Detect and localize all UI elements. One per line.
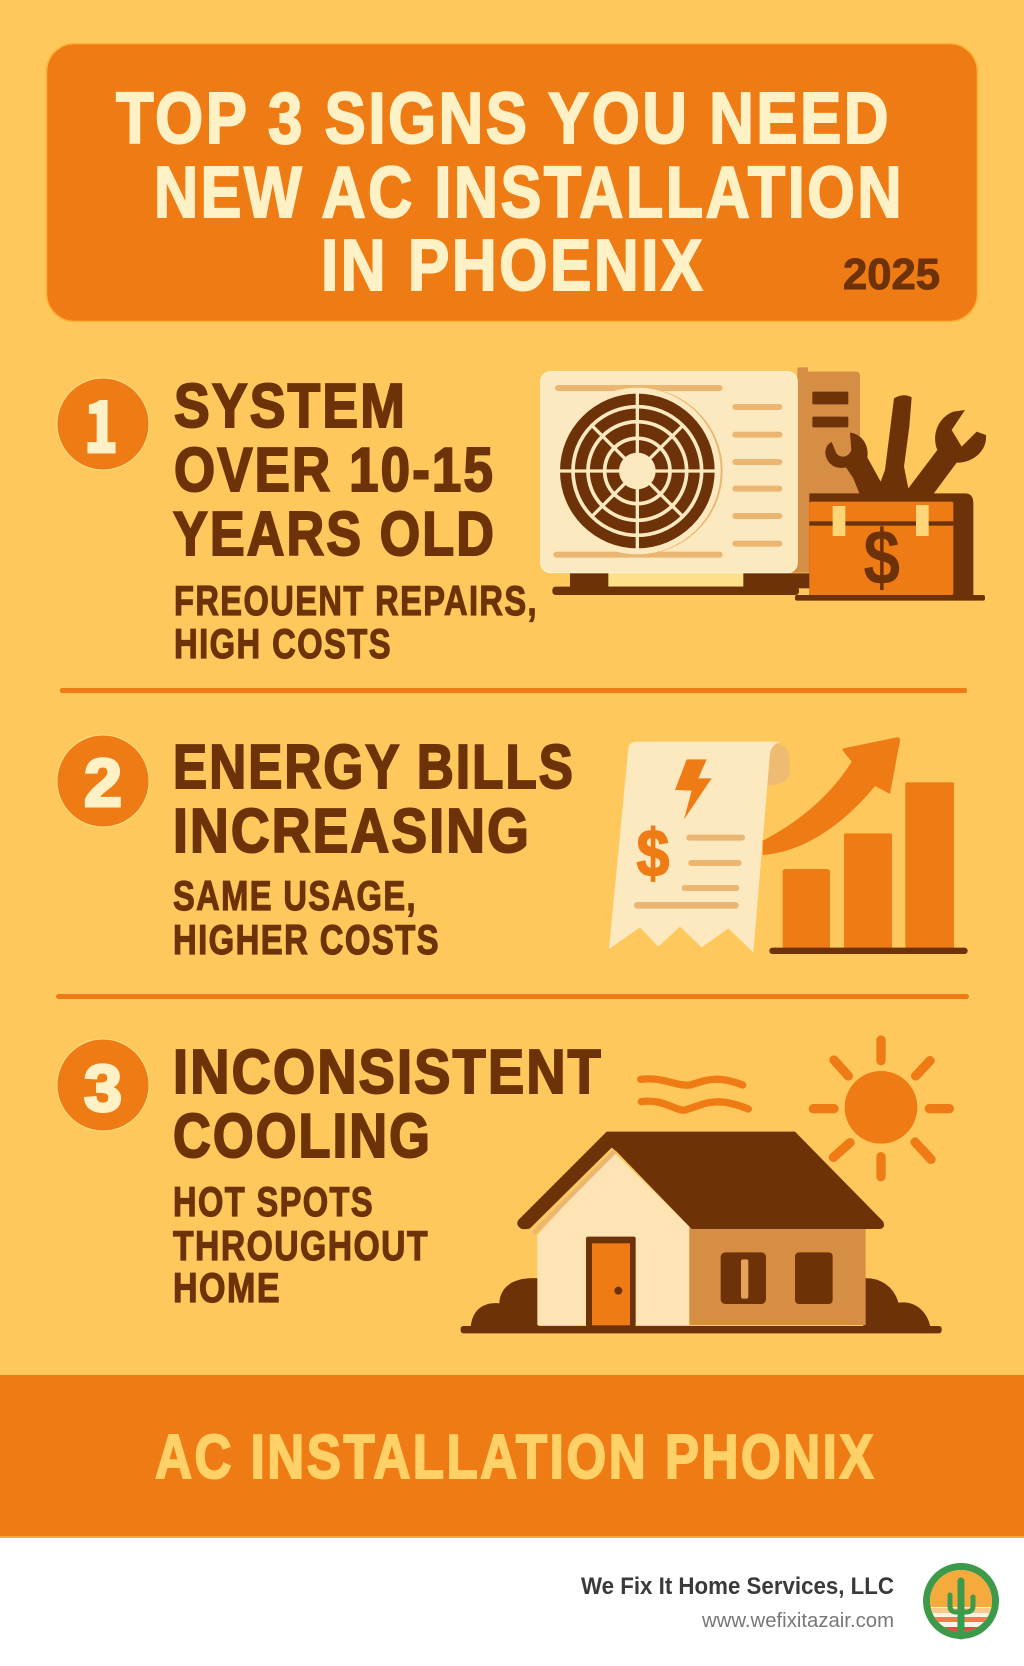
heading: inconsistent cooling xyxy=(173,1038,603,1171)
rising arrow xyxy=(763,737,900,855)
heading: energy bills increasing: INCREASING xyxy=(173,797,531,866)
number badge 2: 2 xyxy=(84,745,122,821)
icon: toolbox xyxy=(809,493,973,601)
subtext: same usage higher costs: SAME USAGE, xyxy=(173,872,417,919)
number badge 1 xyxy=(57,372,149,473)
footer band xyxy=(0,1375,1024,1538)
footer white area xyxy=(0,1538,1024,1666)
panel: sign 3 inconsistent cooling xyxy=(57,1038,949,1333)
band title: AC INSTALLATION PHONIX xyxy=(155,1423,876,1492)
subtext: hot spots throughout home: HOT SPOTS xyxy=(173,1178,374,1225)
icon: toolbox: $ xyxy=(863,513,900,601)
number badge 1: 1 xyxy=(84,372,118,473)
ac unit feet and base xyxy=(552,573,985,601)
heading: system over 10-15 years old: YEARS OLD xyxy=(173,500,496,569)
ac side panel xyxy=(792,367,860,573)
house walls xyxy=(537,1152,866,1325)
number badge 3 xyxy=(57,1039,149,1131)
heading: inconsistent cooling: COOLING xyxy=(173,1102,432,1171)
subtext: hot spots throughout home: HOME xyxy=(173,1264,281,1311)
icon: sun xyxy=(813,1040,949,1177)
ac unit body xyxy=(541,372,797,573)
website url: www.wefixitazair.com xyxy=(701,1610,894,1632)
heading: energy bills increasing xyxy=(173,733,575,866)
roof xyxy=(517,1132,884,1233)
icon: outdoor ac unit with toolbox xyxy=(541,367,986,601)
door xyxy=(586,1237,636,1327)
divider 1 xyxy=(60,688,967,693)
subtext: same usage higher costs: HIGHER COSTS xyxy=(173,916,440,963)
panel: sign 1 system age xyxy=(57,367,986,667)
company name: We Fix It Home Services, LLC xyxy=(581,1573,894,1600)
icon: fan grille xyxy=(554,388,723,554)
bill receipt: $ xyxy=(637,817,669,891)
icon: house with sun and heat xyxy=(461,1040,949,1333)
bushes and ground xyxy=(461,1278,942,1333)
bill receipt xyxy=(609,742,790,952)
icon: electric bill with rising chart xyxy=(609,737,968,954)
heading: inconsistent cooling: INCONSISTENT xyxy=(173,1038,603,1107)
subtext: same usage higher costs xyxy=(173,872,440,963)
subtext: hot spots throughout home: THROUGHOUT xyxy=(173,1222,429,1269)
title: IN PHOENIX xyxy=(321,226,705,306)
header banner xyxy=(46,44,978,322)
heading: system over 10-15 years old xyxy=(173,372,496,569)
subtext: frequent repairs: HIGH COSTS xyxy=(174,620,392,667)
number badge 2 xyxy=(57,735,149,827)
logo: cactus badge xyxy=(923,1563,999,1639)
heading: energy bills increasing: ENERGY BILLS xyxy=(173,733,575,802)
windows xyxy=(721,1252,833,1304)
heading: system over 10-15 years old: OVER 10-15 xyxy=(174,436,495,505)
divider 2 xyxy=(56,994,969,999)
title: TOP 3 SIGNS YOU NEED xyxy=(116,79,891,159)
subtext: hot spots throughout home xyxy=(173,1178,429,1311)
title: NEW AC INSTALLATION xyxy=(154,153,904,233)
title xyxy=(116,79,904,306)
heat waves xyxy=(641,1079,748,1110)
bar chart xyxy=(769,782,968,954)
icon: crossed tools xyxy=(825,395,986,495)
number badge 3: 3 xyxy=(84,1051,122,1125)
heading: system over 10-15 years old: SYSTEM xyxy=(174,372,407,441)
panel: sign 2 energy bills xyxy=(57,733,968,963)
year label: 2025 xyxy=(843,250,940,299)
subtext: frequent repairs xyxy=(174,577,538,667)
subtext: frequent repairs: FREOUENT REPAIRS, xyxy=(174,577,538,624)
